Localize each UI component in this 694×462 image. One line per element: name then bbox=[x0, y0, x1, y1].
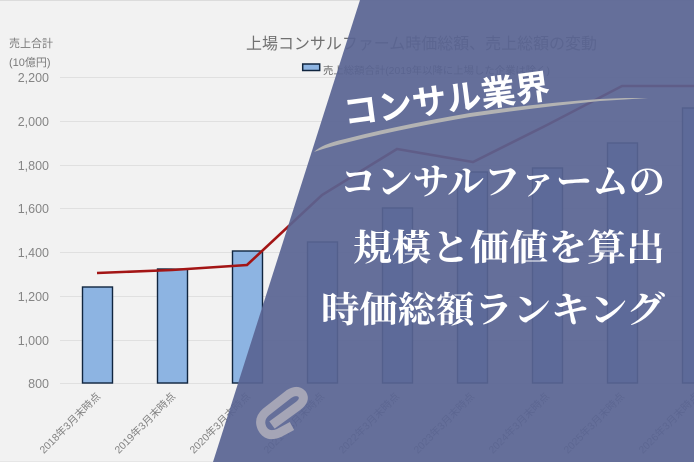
y axis title: (10億円) bbox=[9, 56, 51, 69]
y axis labels: 1,600 bbox=[18, 202, 49, 216]
bars bbox=[82, 108, 694, 383]
panel: diagonal navy overlay bbox=[213, 0, 694, 462]
headline line 3: 時価総額ランキング bbox=[321, 290, 665, 330]
chart title: 上場コンサルファーム時価総額、売上総額の変動 bbox=[246, 35, 597, 53]
y axis labels: 1,200 bbox=[18, 290, 49, 304]
headline line 2: 規模と価値を算出 bbox=[353, 228, 665, 268]
y axis labels bbox=[18, 71, 49, 391]
brush stroke underline bbox=[314, 98, 648, 152]
x axis labels: 2020年3月末時点 bbox=[187, 390, 253, 456]
x axis labels: 2022年3月末時点 bbox=[336, 390, 402, 456]
label: consulting industry: コンサル業界 bbox=[341, 68, 552, 133]
legend: 売上総額合計(2019年以降に上場した企業は除く) bbox=[323, 64, 550, 77]
x axis labels: 2021年3月末時点 bbox=[261, 390, 327, 456]
x axis labels: 2024年3月末時点 bbox=[486, 390, 552, 456]
y axis labels: 1,000 bbox=[18, 334, 49, 348]
y axis title bbox=[9, 36, 53, 69]
x axis labels: 2023年3月末時点 bbox=[411, 390, 477, 456]
icon: link bbox=[261, 392, 303, 435]
headline bbox=[321, 162, 665, 330]
line series bbox=[97, 86, 694, 273]
y axis labels: 2,000 bbox=[18, 115, 49, 129]
y axis labels: 2,200 bbox=[18, 71, 49, 85]
y axis labels: 800 bbox=[28, 377, 49, 391]
y axis title: 売上合計 bbox=[9, 36, 53, 50]
x axis labels: 2019年3月末時点 bbox=[112, 390, 178, 456]
x axis labels: 2025年3月末時点 bbox=[561, 390, 627, 456]
x axis labels: 2018年3月末時点 bbox=[37, 390, 103, 456]
y axis labels: 1,400 bbox=[18, 246, 49, 260]
x axis labels bbox=[37, 390, 694, 456]
headline line 1: コンサルファームの bbox=[340, 162, 665, 202]
y axis labels: 1,800 bbox=[18, 159, 49, 173]
